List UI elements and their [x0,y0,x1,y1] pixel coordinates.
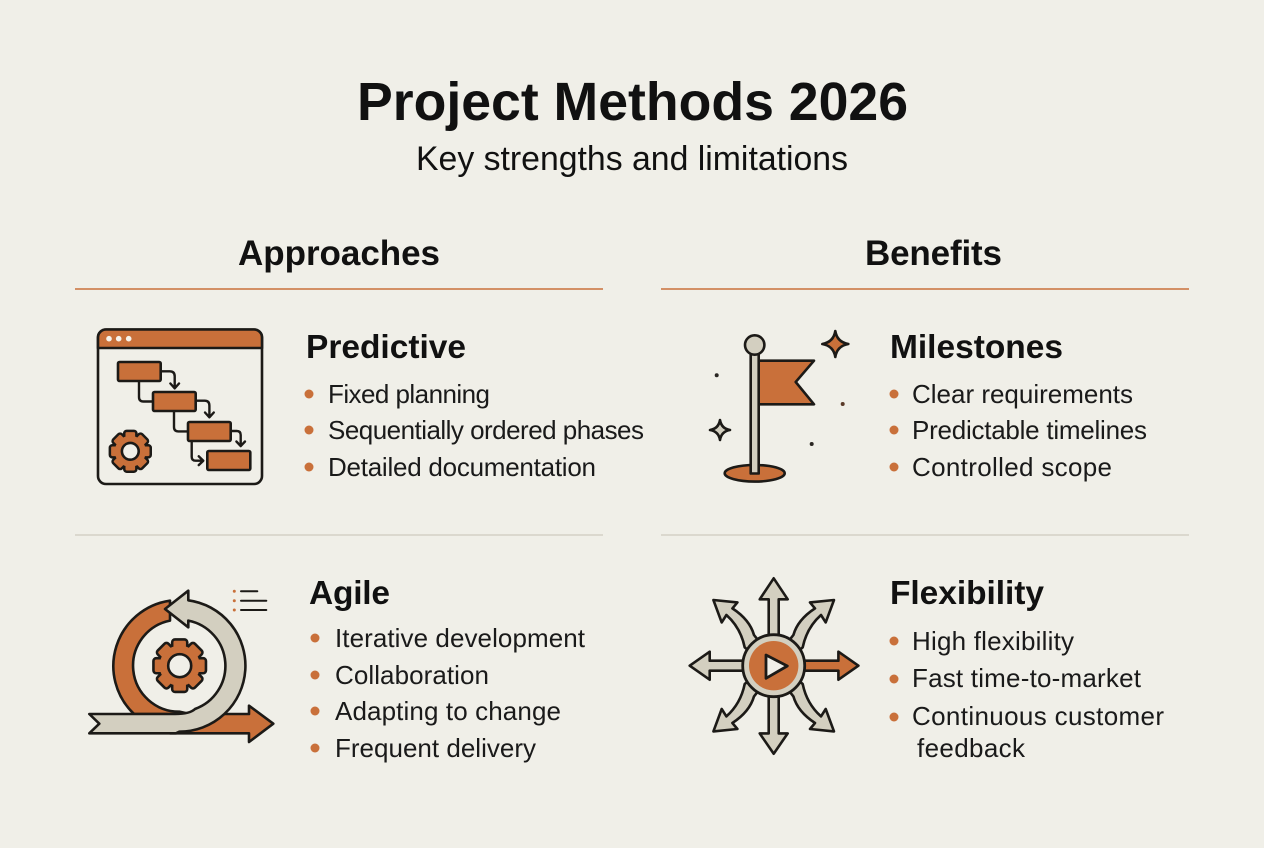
heading: Milestones: Milestones [890,329,1063,366]
list: Agile items: Collaboration [335,660,489,690]
list: Flexibility items: Continuous customer [912,701,1164,731]
icon: agile loop [89,590,273,742]
list: Predictive items: Detailed documentation [328,452,596,482]
panel: Milestones [710,329,1147,482]
heading: Agile: Agile [309,575,390,612]
list: Predictive items: Fixed planning [328,379,490,409]
column heading: Benefits: Benefits [865,234,1002,273]
panel: Predictive [98,329,644,484]
list: Predictive items: Sequentially ordered phases [328,415,644,445]
icon: milestone flag [710,331,848,482]
list: Predictive items [304,379,644,482]
list: Flexibility items [890,626,1164,763]
list: Agile items: Frequent delivery [335,733,536,763]
subtitle: Key strengths and limitations [416,140,848,178]
column heading: Approaches: Approaches [238,234,440,273]
panel: Agile [89,575,586,763]
list: Milestones items [890,379,1147,482]
list: Agile items [310,623,586,763]
heading: Predictive: Predictive [306,329,466,366]
icon: radiating arrows [690,578,858,754]
list: Flexibility items: Fast time-to-market [912,663,1142,693]
list: Milestones items: Controlled scope [912,452,1112,482]
icon: gantt window [98,330,262,484]
panel: Flexibility [690,575,1164,763]
list: Milestones items: Clear requirements [912,379,1133,409]
list: Flexibility items: feedback [917,733,1026,763]
list: Agile items: Iterative development [335,623,586,653]
list: Milestones items: Predictable timelines [912,415,1147,445]
list: Flexibility items: High flexibility [912,626,1074,656]
heading: Flexibility: Flexibility [890,575,1044,612]
list: Agile items: Adapting to change [335,696,561,726]
title: Project Methods 2026 [357,72,908,132]
